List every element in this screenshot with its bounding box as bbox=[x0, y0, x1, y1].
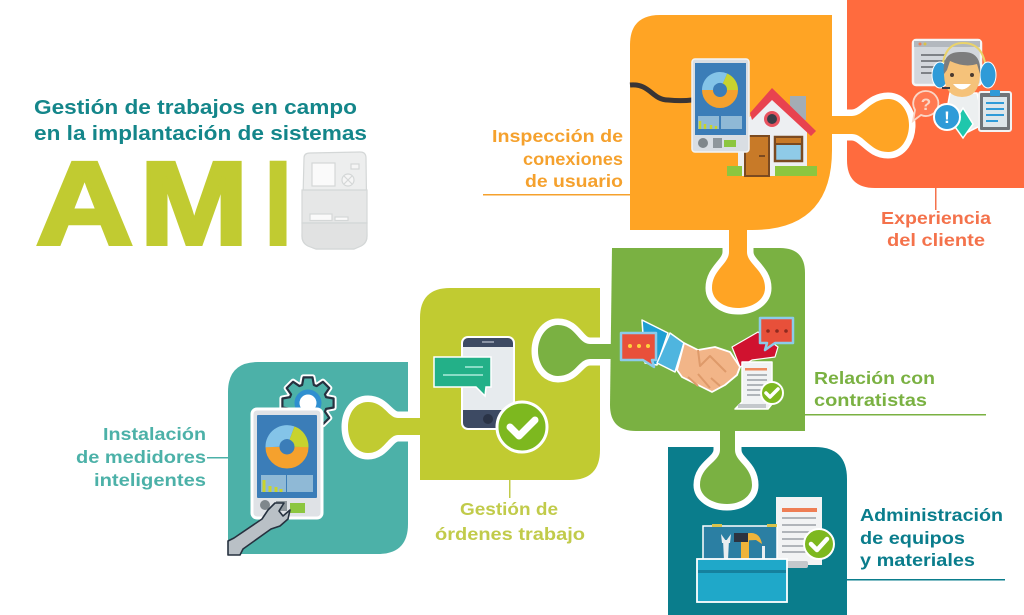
label: instalación: de medidores bbox=[76, 447, 206, 467]
label: administración: Administración bbox=[860, 505, 1003, 525]
label: inspección: conexiones bbox=[523, 149, 623, 169]
icon: customer service agent: ! bbox=[944, 108, 950, 127]
label: relación: contratistas bbox=[814, 390, 927, 410]
icon: grey smart meter bbox=[302, 152, 367, 249]
label: instalación: inteligentes bbox=[94, 470, 206, 490]
panel: experiencia puzzle piece bbox=[847, 0, 1024, 188]
panel: gestión de órdenes puzzle piece bbox=[348, 288, 600, 480]
label: administración: y materiales bbox=[860, 550, 975, 570]
icon: customer service agent bbox=[913, 40, 1011, 138]
panel: inspección puzzle piece bbox=[630, 15, 909, 308]
label: gestión de órdenes: órdenes trabajo bbox=[435, 524, 585, 544]
label: relación bbox=[805, 368, 986, 416]
icon: meter and house bbox=[630, 59, 817, 176]
label: inspección bbox=[483, 126, 630, 196]
title bbox=[34, 96, 367, 145]
title: en la implantación de sistemas bbox=[34, 122, 367, 145]
label: instalación bbox=[76, 424, 228, 490]
heading: AMI: I bbox=[265, 137, 291, 269]
label: gestión de órdenes: Gestión de bbox=[460, 499, 558, 519]
icon: toolbox with checklist bbox=[697, 497, 834, 602]
label: experiencia bbox=[881, 188, 991, 250]
label: experiencia: Experiencia bbox=[881, 208, 991, 228]
panel: relación con contratistas puzzle piece bbox=[538, 248, 805, 504]
heading: AMI: A bbox=[36, 137, 133, 269]
heading: AMI: M bbox=[140, 138, 248, 270]
heading: AMI bbox=[36, 137, 291, 270]
label: experiencia: del cliente bbox=[887, 230, 985, 250]
label: inspección: Inspección de bbox=[492, 126, 623, 146]
title: Gestión de trabajos en campo bbox=[34, 96, 357, 119]
label: relación: Relación con bbox=[814, 368, 935, 388]
label: instalación: Instalación bbox=[103, 424, 206, 444]
label: administración: de equipos bbox=[860, 528, 965, 548]
panel: instalación puzzle piece bbox=[228, 362, 408, 554]
panel: administración puzzle piece bbox=[668, 447, 847, 615]
label: inspección: de usuario bbox=[525, 171, 623, 191]
icon: handshake bbox=[621, 318, 793, 409]
icon: phone with message and check bbox=[434, 337, 547, 452]
icon: customer service agent: ? bbox=[921, 95, 931, 114]
label: administración bbox=[847, 505, 1005, 580]
icon: meter with gear and wrench bbox=[228, 377, 334, 555]
label: gestión de órdenes bbox=[435, 480, 585, 544]
